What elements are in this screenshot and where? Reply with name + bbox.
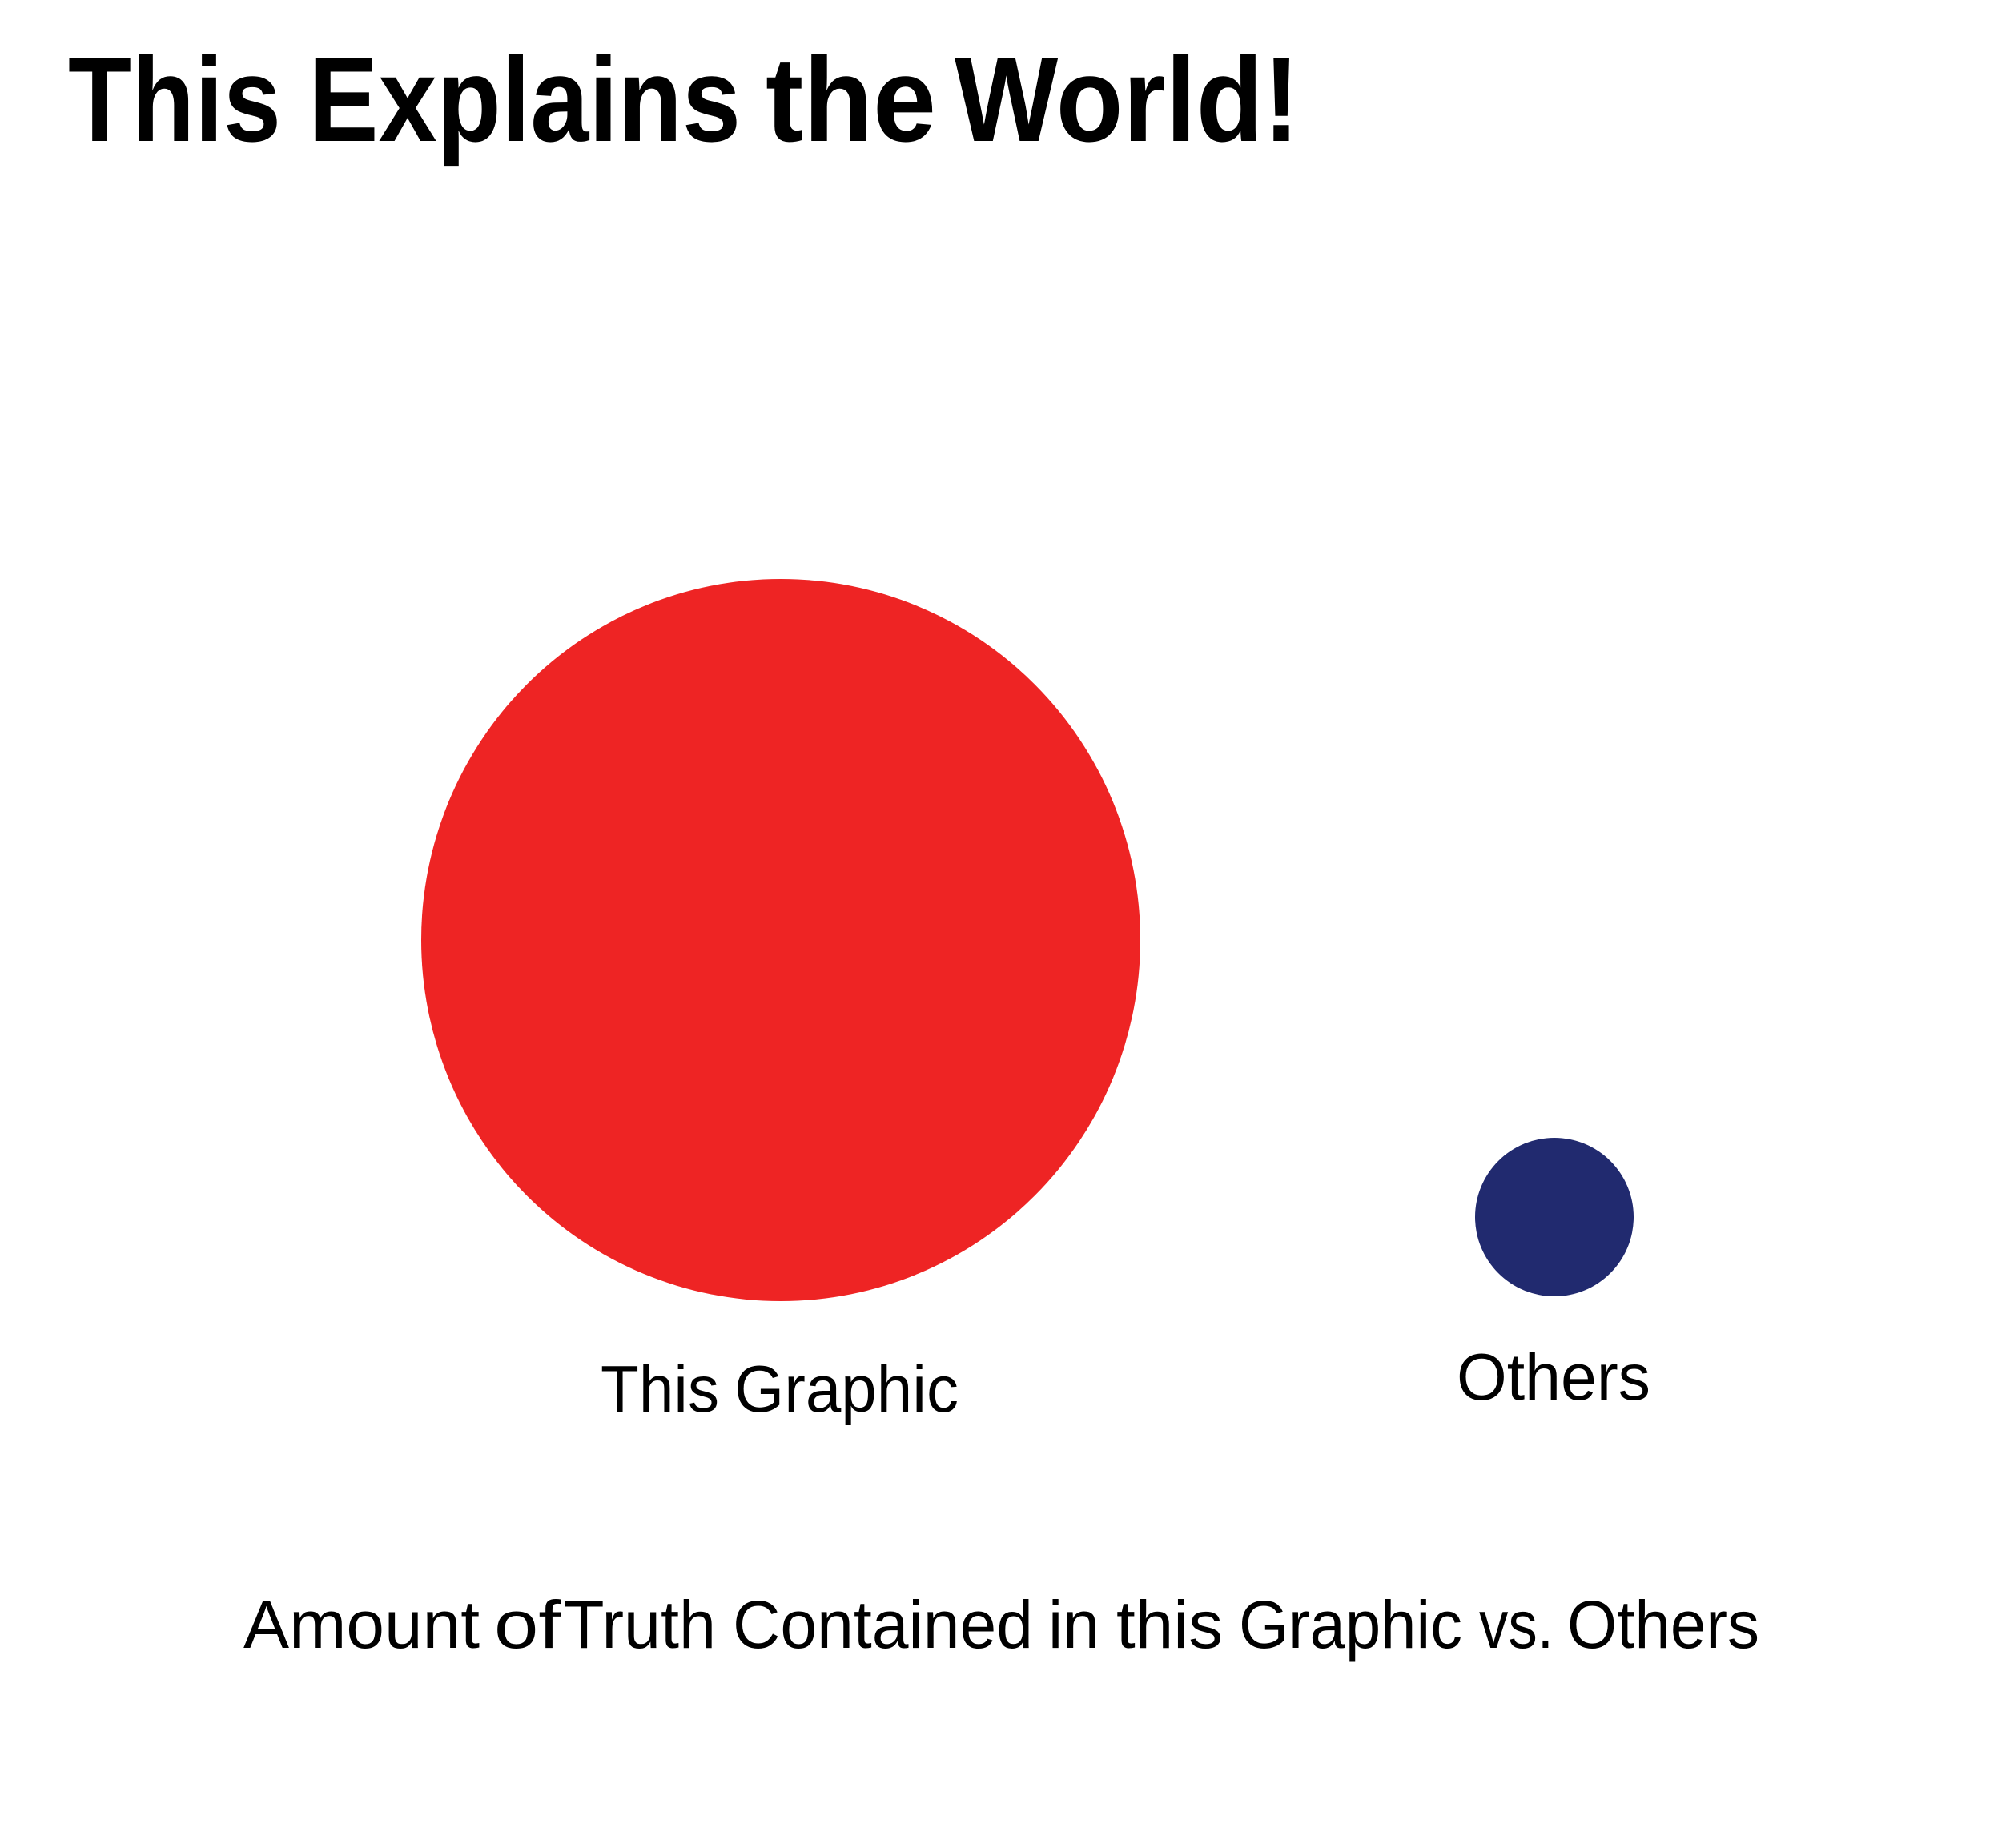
caption: Truth: [564, 1587, 716, 1662]
title: the: [766, 32, 936, 167]
caption: Contained: [733, 1587, 1033, 1662]
label: this graphic: Graphic: [734, 1352, 959, 1426]
circle: this graphic: [421, 579, 1140, 1301]
circle: others: [1475, 1138, 1634, 1296]
title: This: [68, 32, 281, 167]
label: others: Others: [1457, 1340, 1650, 1414]
caption: Others: [1567, 1587, 1759, 1662]
title: World!: [955, 32, 1300, 167]
caption: in: [1048, 1587, 1099, 1662]
title: Explains: [308, 32, 741, 167]
caption: Graphic: [1239, 1587, 1462, 1662]
label: this graphic: This: [601, 1352, 719, 1426]
caption: Amount: [243, 1587, 480, 1662]
caption: of: [494, 1587, 561, 1662]
caption: this: [1116, 1587, 1223, 1662]
caption: vs.: [1479, 1587, 1554, 1662]
